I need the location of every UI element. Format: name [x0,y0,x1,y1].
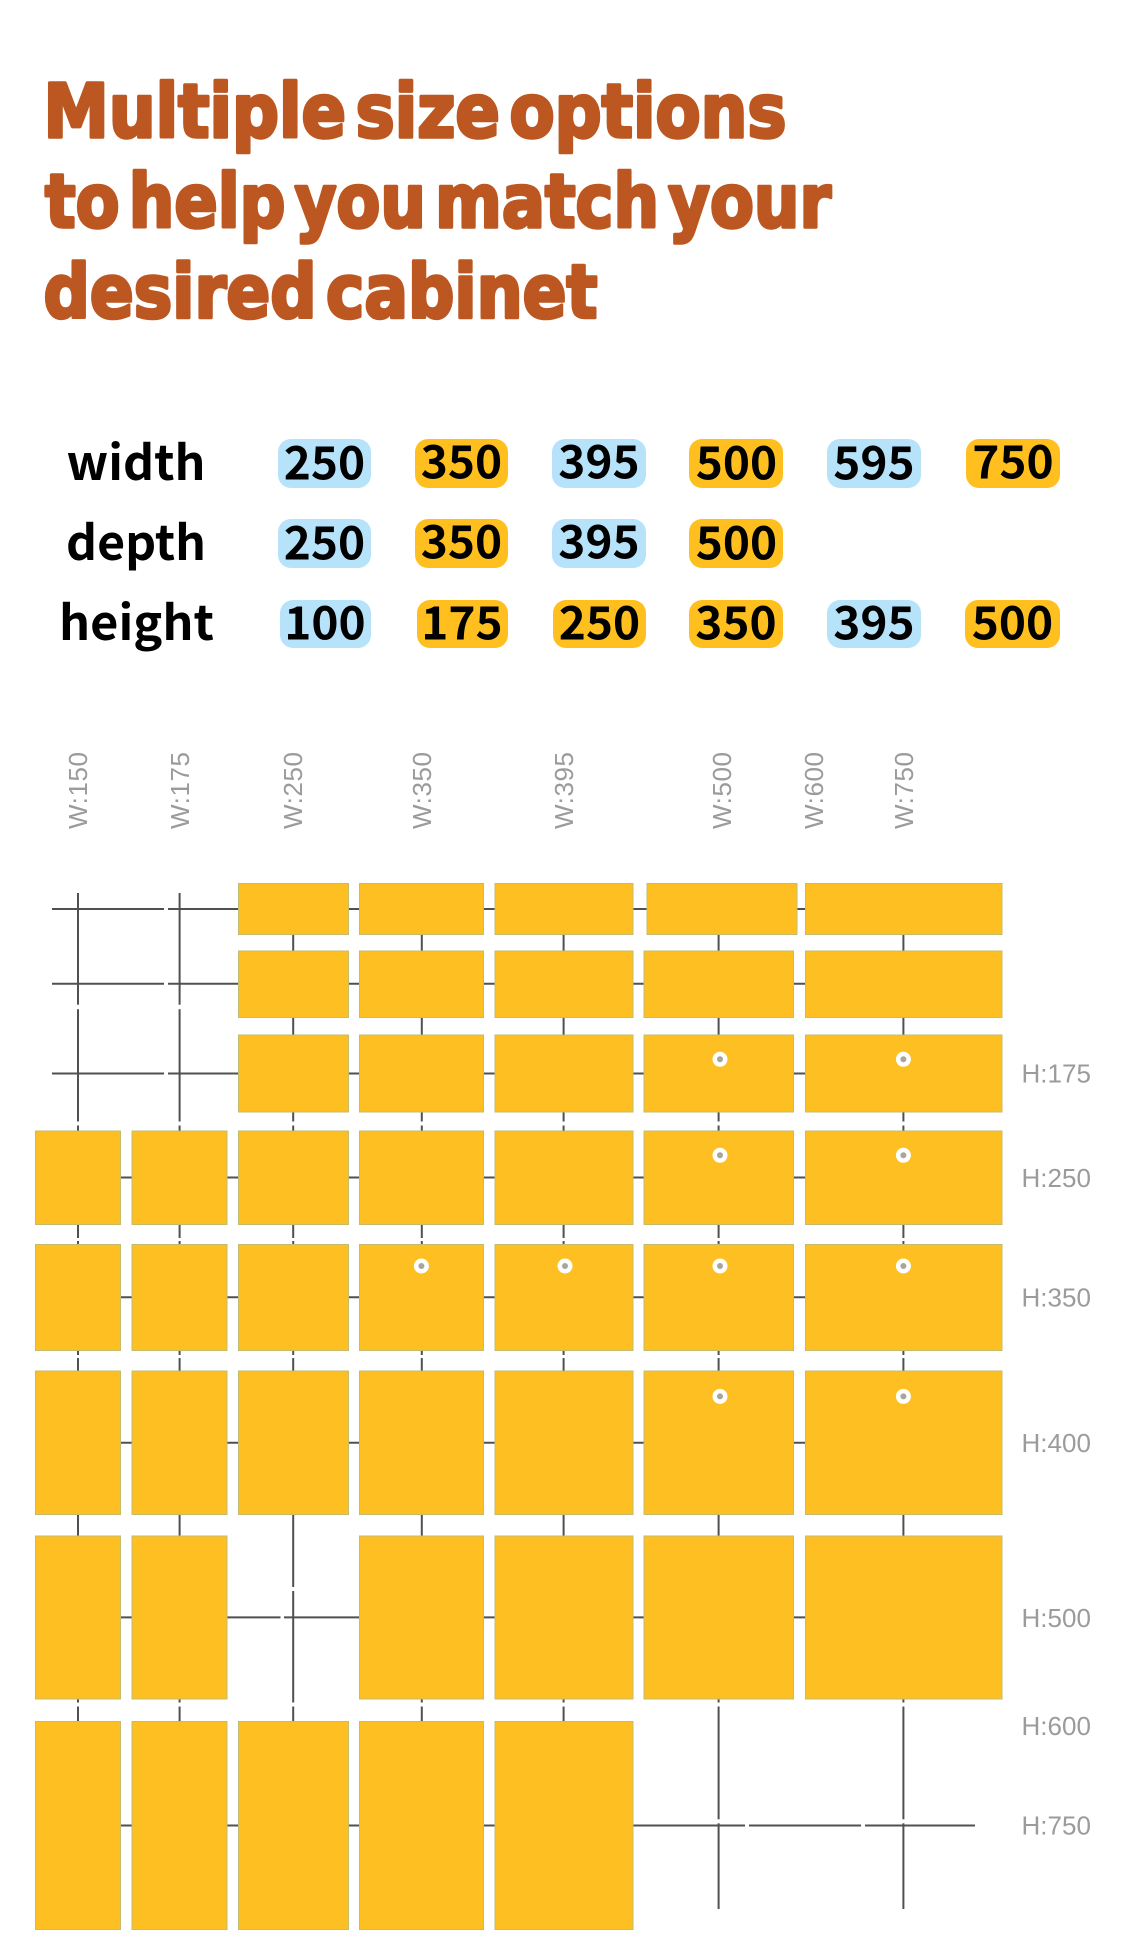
width row: width [66,424,206,494]
height row: 250 [559,588,640,654]
height row: height [59,584,214,654]
height row: 500 [972,588,1053,654]
width row: 750 [972,426,1054,492]
height labels: H:500 [1022,1603,1091,1633]
height row: 100 [284,588,366,654]
width labels: W:750 [889,752,919,829]
width row: 500 [696,428,777,494]
height labels: H:600 [1022,1711,1091,1741]
height labels [1022,1058,1091,1840]
width labels: W:150 [63,752,93,829]
title: to help you match your [45,159,831,245]
depth row: 395 [558,506,640,572]
title: desired cabinet [44,250,598,336]
height labels: H:175 [1022,1058,1091,1088]
height row: 175 [421,588,503,654]
height labels: H:400 [1022,1428,1091,1458]
width row [66,424,1060,494]
width row: 395 [558,426,640,492]
screw hole markers [414,1052,911,1404]
width labels: W:500 [707,752,737,829]
height row: 350 [695,588,777,654]
size table [59,424,1060,654]
depth row: 350 [421,506,502,572]
title: Multiple size options [44,69,786,155]
yellow cabinet tiles [36,884,1002,1930]
width labels: W:600 [799,752,829,829]
height row: 395 [833,588,915,654]
width row: 350 [421,426,502,492]
depth row: 500 [696,508,777,574]
title [44,69,831,336]
grid lines [36,893,1000,1925]
width labels: W:350 [407,752,437,829]
width labels: W:395 [549,752,579,829]
height labels: H:750 [1022,1810,1091,1840]
width labels: W:250 [278,752,308,829]
width row: 595 [833,428,915,494]
width labels: W:175 [165,752,195,829]
line gaps [70,900,912,1833]
depth row: depth [66,504,206,574]
height labels: H:250 [1022,1163,1091,1193]
size matrix chart [36,752,1091,1930]
depth row: 250 [284,508,365,574]
depth row [66,504,783,574]
width labels [63,752,919,829]
width row: 250 [284,428,365,494]
height row [59,584,1060,654]
height labels: H:350 [1022,1282,1091,1312]
